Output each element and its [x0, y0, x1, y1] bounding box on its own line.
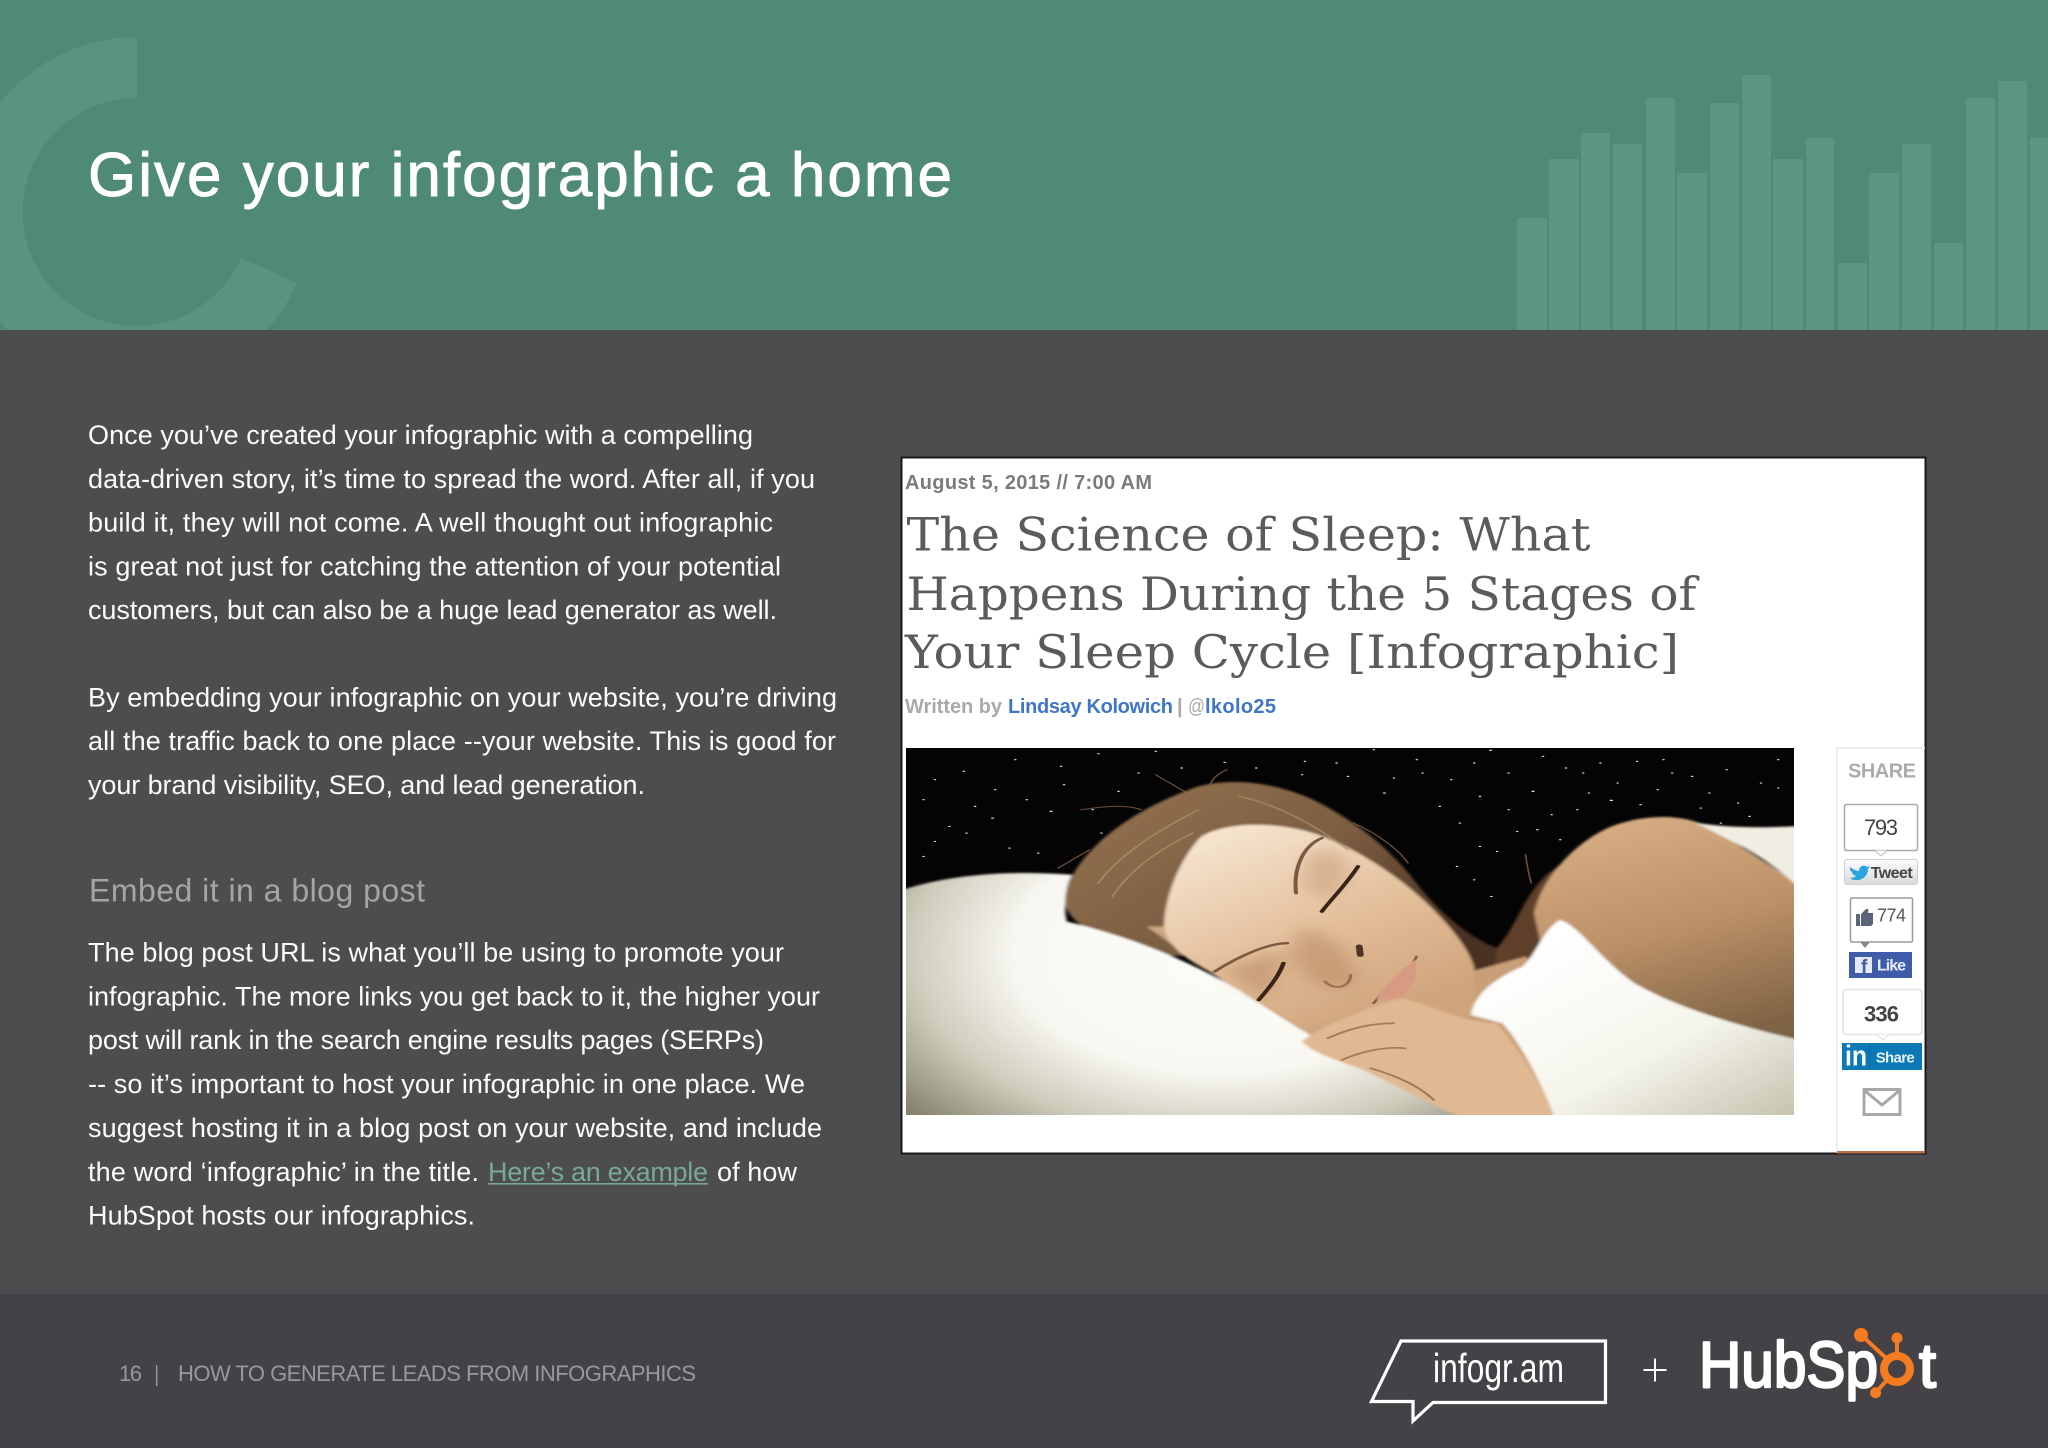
byline: Written by: [905, 696, 1003, 718]
hand: [1302, 998, 1557, 1123]
header band: [0, 0, 2048, 330]
facebook like button: Like: [1877, 958, 1906, 975]
icon: twitter bird: [1850, 866, 1870, 880]
blog headline: The Science of Sleep: What: [906, 508, 1591, 562]
blog headline: [904, 508, 1700, 679]
like counter: [1850, 898, 1912, 948]
page number and document title: HOW TO GENERATE LEADS FROM INFOGRAPHICS: [178, 1361, 696, 1386]
shoulder: [1534, 817, 1807, 1047]
share column: [1837, 748, 1925, 1154]
tweet button: [1844, 860, 1918, 884]
like counter: 774: [1877, 906, 1906, 926]
icon: orange sprocket: [1854, 1328, 1910, 1398]
logo: HubSpot: t: [1919, 1332, 1936, 1401]
soft facial shading: [1222, 850, 1354, 1000]
decorative bar chart: [1517, 75, 2048, 330]
icon: email envelope: [1864, 1090, 1900, 1114]
paragraph: embedding: all the traffic back to one place --your website. This is good for: [88, 726, 836, 756]
paragraph: spread the word: data-driven story, it’s time to spread the word. After all, if you: [88, 464, 815, 494]
paragraph: blog post: suggest hosting it in a blog post on your website, and include: [88, 1113, 822, 1143]
paragraph: blog post: -- so it’s important to host your infographic in one place. We: [88, 1069, 805, 1099]
page number and document title: 16: [119, 1361, 142, 1386]
text column: [88, 420, 837, 1230]
back hair near neck: [1491, 850, 1580, 983]
sheet: [1471, 920, 1807, 1123]
facebook like button: [1849, 952, 1912, 978]
icon: facebook f: f: [1861, 957, 1868, 978]
subheading: Embed it in a blog post: [89, 873, 425, 909]
share label: SHARE: [1848, 761, 1916, 783]
skin base under the face edge: [1147, 926, 1417, 1040]
pillow: [889, 873, 1474, 1123]
paragraph: blog post: post will rank in the search engine results pages (SERPs): [88, 1025, 764, 1055]
linkedin share button: [1842, 1041, 1922, 1073]
tweet counter: 793: [1864, 815, 1898, 840]
linkedin counter: [1843, 990, 1922, 1040]
neck and skin base under the hand: [1405, 957, 1571, 1123]
byline: @: [1188, 696, 1205, 718]
blog headline: Your Sleep Cycle [Infographic]: [904, 625, 1679, 679]
paragraph: blog post: The blog post URL is what you’ll be using to promote your: [88, 938, 784, 968]
footer band: [0, 1294, 2048, 1448]
paragraph: blog post: of how: [717, 1157, 798, 1187]
lips: [1376, 960, 1417, 1000]
face: [1164, 825, 1475, 1030]
photo: woman sleeping under stars: [906, 748, 1794, 1115]
icon: thumbs up: [1856, 909, 1873, 926]
paragraph: blog post: infographic. The more links you get back to it, the higher your: [88, 982, 820, 1012]
byline: |: [1177, 696, 1183, 718]
hair highlights: [1098, 796, 1348, 896]
finger creases: [1328, 1023, 1434, 1100]
paragraph: spread the word: is great not just for catching the attention of your potential: [88, 552, 781, 582]
paragraph: embedding: your brand visibility, SEO, and lead generation.: [88, 770, 645, 800]
tweet button: Tweet: [1871, 865, 1913, 882]
logo: infogr.am speech bubble: infogr.am: [1433, 1345, 1564, 1391]
paragraph: embedding: By embedding your infographic on your website, you’re driving: [88, 682, 837, 712]
hair: [1064, 782, 1528, 983]
page background: [0, 330, 2048, 1294]
logo: HubSpot: HubSp: [1699, 1328, 1878, 1401]
title: Give your infographic a home: [88, 141, 952, 210]
facial features: [1215, 838, 1417, 1003]
date: August 5, 2015 // 7:00 AM: [905, 472, 1152, 494]
tweet counter: [1844, 804, 1918, 856]
linkedin counter: 336: [1864, 1002, 1899, 1027]
linkedin share button: in: [1845, 1041, 1867, 1073]
panel: blog post screenshot: [889, 458, 1925, 1154]
paragraph: blog post: Here’s an example: [488, 1157, 708, 1187]
top-right sheet: [1695, 822, 1807, 895]
paragraph: blog post: [88, 938, 822, 1230]
paragraph: spread the word: [88, 420, 815, 625]
flyaway hair strands: [1058, 770, 1531, 883]
paragraph: spread the word: build it, they will not come. A well thought out infographic: [88, 508, 773, 538]
plus sign: [1644, 1358, 1666, 1382]
paragraph: spread the word: Once you’ve created your infographic with a compelling: [88, 420, 753, 450]
linkedin share button: Share: [1876, 1050, 1915, 1067]
paragraph: embedding: [88, 682, 837, 800]
byline: lkolo25: [1205, 696, 1276, 718]
icon: decorative donut chart: [0, 37, 297, 387]
logo: infogr.am speech bubble: [1372, 1341, 1606, 1421]
paragraph: blog post: the word ‘infographic’ in the title.: [88, 1157, 479, 1187]
paragraph: blog post: HubSpot hosts our infographics.: [88, 1200, 475, 1230]
byline: Lindsay Kolowich: [1008, 696, 1173, 718]
blog headline: Happens During the 5 Stages of: [906, 567, 1700, 621]
byline: [905, 696, 1276, 718]
paragraph: spread the word: customers, but can also be a huge lead generator as well.: [88, 595, 777, 625]
